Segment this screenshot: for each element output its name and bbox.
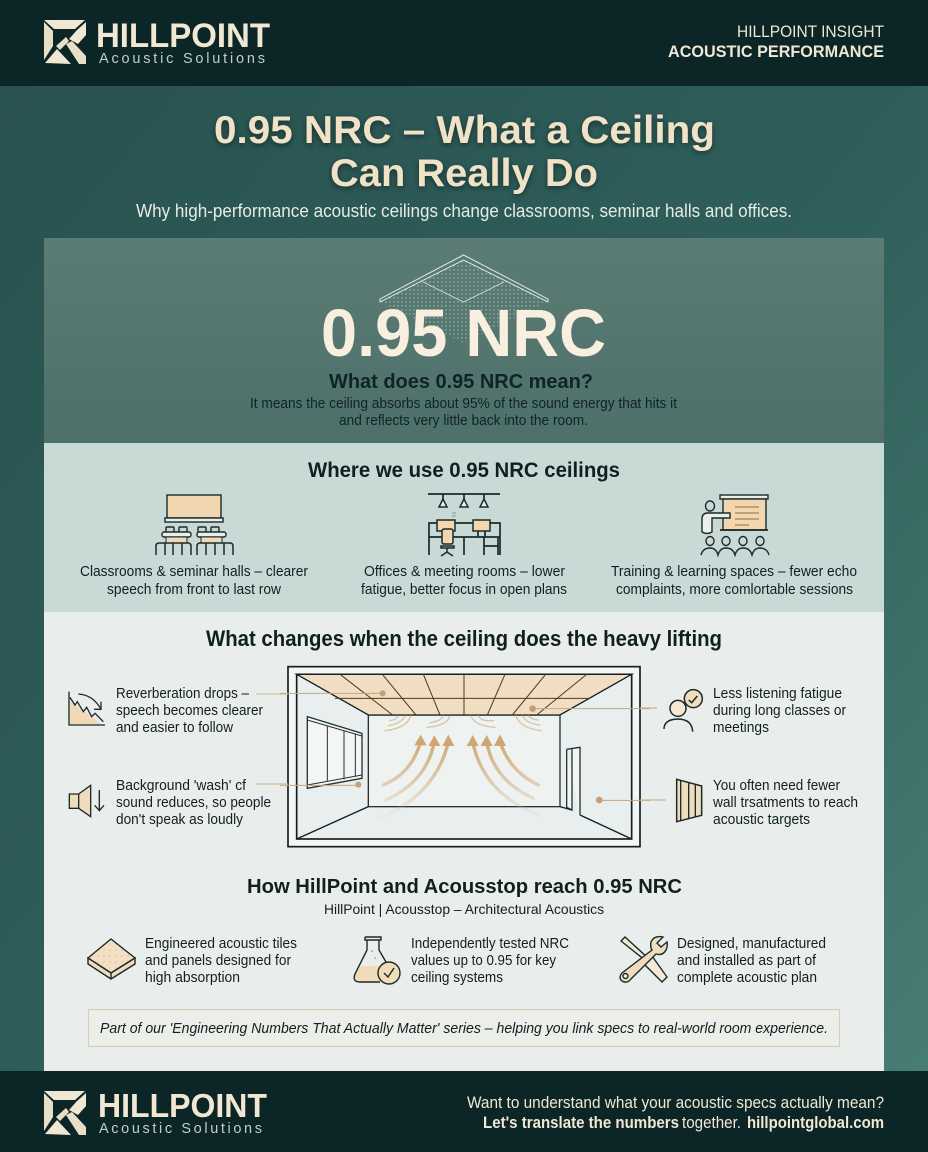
caption: office: Offices & meeting rooms – lower bbox=[364, 563, 565, 580]
header logo: Acoustic Solutions bbox=[99, 51, 265, 67]
icon: tile bbox=[88, 939, 135, 979]
header logo: HILLPOINT bbox=[96, 17, 270, 55]
heading: how hillpoint: How HillPoint and Acousstop reach 0.95 NRC bbox=[247, 876, 682, 898]
panel: what changes and how bbox=[44, 612, 884, 1071]
icon: training bbox=[701, 495, 769, 555]
title: Can Really Do bbox=[330, 152, 598, 195]
room diagram bbox=[280, 667, 650, 847]
callout: fewer wall treatments bbox=[640, 777, 858, 828]
header logo bbox=[44, 17, 270, 67]
item: designed and installed: complete acoustic plan bbox=[677, 969, 817, 986]
footer logo: HILLPOINT bbox=[98, 1087, 267, 1124]
callout: reverberation bbox=[69, 685, 288, 736]
callout: listening fatigue: during long classes or bbox=[713, 702, 846, 719]
item: acoustic tiles: high absorption bbox=[145, 969, 240, 986]
title bbox=[214, 109, 715, 195]
header label: HILLPOINT INSIGHT bbox=[737, 23, 884, 41]
footer logo: Acoustic Solutions bbox=[99, 1121, 262, 1137]
caption: training: complaints, more comlortable sessions bbox=[616, 581, 853, 598]
sound arrows bbox=[380, 742, 538, 818]
callout: background wash: Background 'wash' cf bbox=[116, 777, 247, 794]
callout: fewer wall treatments: wall trsatments to reach bbox=[712, 794, 858, 811]
big number: 0.95 NRC bbox=[321, 296, 606, 371]
caption: office bbox=[361, 563, 567, 598]
item: designed and installed: and installed as part of bbox=[677, 952, 817, 969]
icon: reverberation chart bbox=[69, 692, 105, 725]
header bar bbox=[0, 0, 928, 86]
callout: series note bbox=[88, 1010, 840, 1046]
icon: ceiling panel bbox=[380, 255, 548, 343]
item: designed and installed bbox=[620, 935, 826, 986]
caption: classroom: Classrooms & seminar halls – clearer bbox=[80, 563, 308, 580]
icon: person with check bbox=[664, 690, 702, 732]
footer call to action: Let's translate the numbers bbox=[483, 1114, 679, 1132]
footer call to action: together. bbox=[682, 1114, 741, 1132]
footer logo bbox=[44, 1087, 267, 1137]
caption: classroom: speech from front to last row bbox=[107, 581, 281, 598]
callout: reverberation: Reverberation drops – bbox=[116, 685, 250, 702]
caption: classroom bbox=[80, 563, 308, 598]
panel: where we use bbox=[44, 443, 884, 612]
item: acoustic tiles: and panels designed for bbox=[145, 952, 291, 969]
callout: listening fatigue bbox=[640, 685, 846, 736]
icon: wall panel bbox=[677, 779, 702, 822]
hero explanation: It means the ceiling absorbs about 95% of the sound energy that hits it bbox=[250, 395, 678, 412]
caption: office: fatigue, better focus in open plans bbox=[361, 581, 567, 598]
subheading: brands: HillPoint | Acousstop – Architectural Acoustics bbox=[324, 901, 604, 917]
callout: reverberation: and easier to follow bbox=[116, 719, 233, 736]
footer call to action bbox=[467, 1094, 884, 1132]
icon: office bbox=[428, 494, 500, 556]
heading: where we use: Where we use 0.95 NRC ceilings bbox=[308, 459, 620, 482]
callout: listening fatigue: Less listening fatigue bbox=[713, 685, 842, 702]
item: acoustic tiles bbox=[88, 935, 297, 986]
callout: background wash: sound reduces, so people bbox=[116, 794, 271, 811]
icon: speaker down bbox=[69, 785, 104, 817]
header label bbox=[668, 23, 884, 61]
item: tested values: values up to 0.95 for key bbox=[411, 952, 556, 969]
item: tested values: ceiling systems bbox=[411, 969, 503, 986]
callout: fewer wall treatments: You often need fewer bbox=[713, 777, 840, 794]
title: 0.95 NRC – What a Ceiling bbox=[214, 109, 715, 152]
callout: background wash: don't speak as loudly bbox=[116, 811, 243, 828]
item: designed and installed: Designed, manufactured bbox=[677, 935, 826, 952]
caption: training: Training & learning spaces – fewer echo bbox=[611, 563, 857, 580]
item: acoustic tiles: Engineered acoustic tiles bbox=[145, 935, 297, 952]
callout: reverberation: speech becomes clearer bbox=[116, 702, 263, 719]
item: tested values bbox=[354, 935, 569, 986]
callout: background wash bbox=[69, 777, 288, 828]
hero explanation bbox=[250, 395, 678, 429]
icon: classroom bbox=[156, 495, 233, 555]
icon: tools bbox=[620, 937, 667, 982]
footer bar bbox=[0, 1071, 928, 1152]
callout: listening fatigue: meetings bbox=[713, 719, 769, 736]
caption: training bbox=[611, 563, 857, 598]
heading: what changes: What changes when the ceiling does the heavy lifting bbox=[206, 626, 722, 651]
callout dots bbox=[355, 690, 603, 803]
callout: fewer wall treatments: acoustic targets bbox=[713, 811, 810, 828]
hero explanation: and reflects very little back into the room. bbox=[339, 412, 588, 429]
item: tested values: Independently tested NRC bbox=[411, 935, 569, 952]
footer call to action: Want to understand what your acoustic specs actually mean? bbox=[467, 1094, 884, 1112]
header label: ACOUSTIC PERFORMANCE bbox=[668, 42, 884, 61]
callout: series note: Part of our 'Engineering Numbers That Actually Matter' series – helping you link specs to real-world room experience. bbox=[100, 1020, 828, 1037]
icon: flask bbox=[354, 937, 400, 984]
hero question: What does 0.95 NRC mean? bbox=[329, 370, 593, 393]
subtitle: Why high-performance acoustic ceilings change classrooms, seminar halls and offices. bbox=[136, 201, 792, 221]
panel: hero 0.95 NRC bbox=[44, 238, 884, 443]
footer call to action: hillpointglobal.com bbox=[747, 1114, 884, 1132]
